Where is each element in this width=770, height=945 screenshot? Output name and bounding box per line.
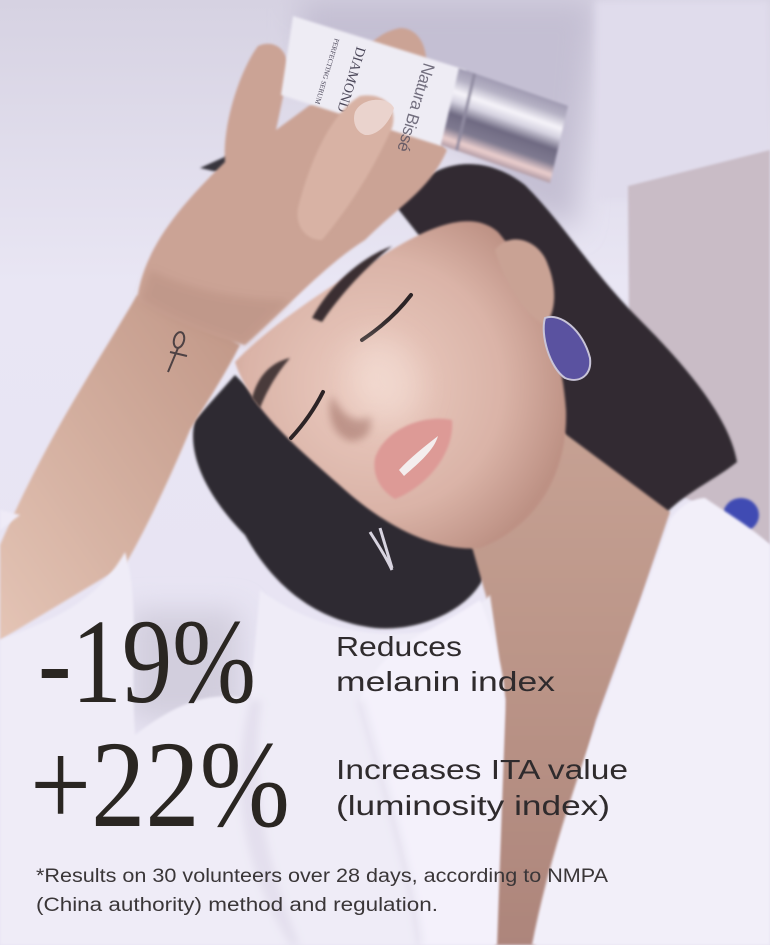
stat: +22% [30,716,628,853]
ear [495,239,554,325]
lips [374,419,452,499]
caption: melanin index [336,666,555,697]
bottle label [313,37,368,114]
thumb over bottle [297,95,393,240]
eyebrows [312,246,392,322]
photo: white blazer [0,498,770,945]
photo: neck and chest [470,430,670,945]
bottle label: PERFECTING SERUM [313,37,341,106]
caption: (luminosity index) [336,790,610,821]
photo: earrings [370,317,590,570]
bottle body [281,16,466,146]
product: serum bottle: Natura Bissé [393,61,438,154]
photo: face [235,221,566,548]
figure: +22% [30,716,290,853]
tattoo on wrist [168,331,187,372]
figure: -19% [38,595,256,729]
photo: hair [193,150,737,628]
caption: Increases ITA value [336,754,628,785]
footnote: *Results on 30 volunteers over 28 days, according to NMPA [36,866,608,887]
footnote: (China authority) method and regulation. [36,895,438,916]
photo: raised arm and hand [0,28,447,640]
silver collar and cap [441,68,568,183]
nose [330,395,371,441]
closed eyes [362,295,411,340]
bottle label: DIAMOND [333,45,368,114]
product: serum bottle [281,16,568,240]
caption: Reduces [336,631,462,662]
stat: -19% [38,595,555,729]
